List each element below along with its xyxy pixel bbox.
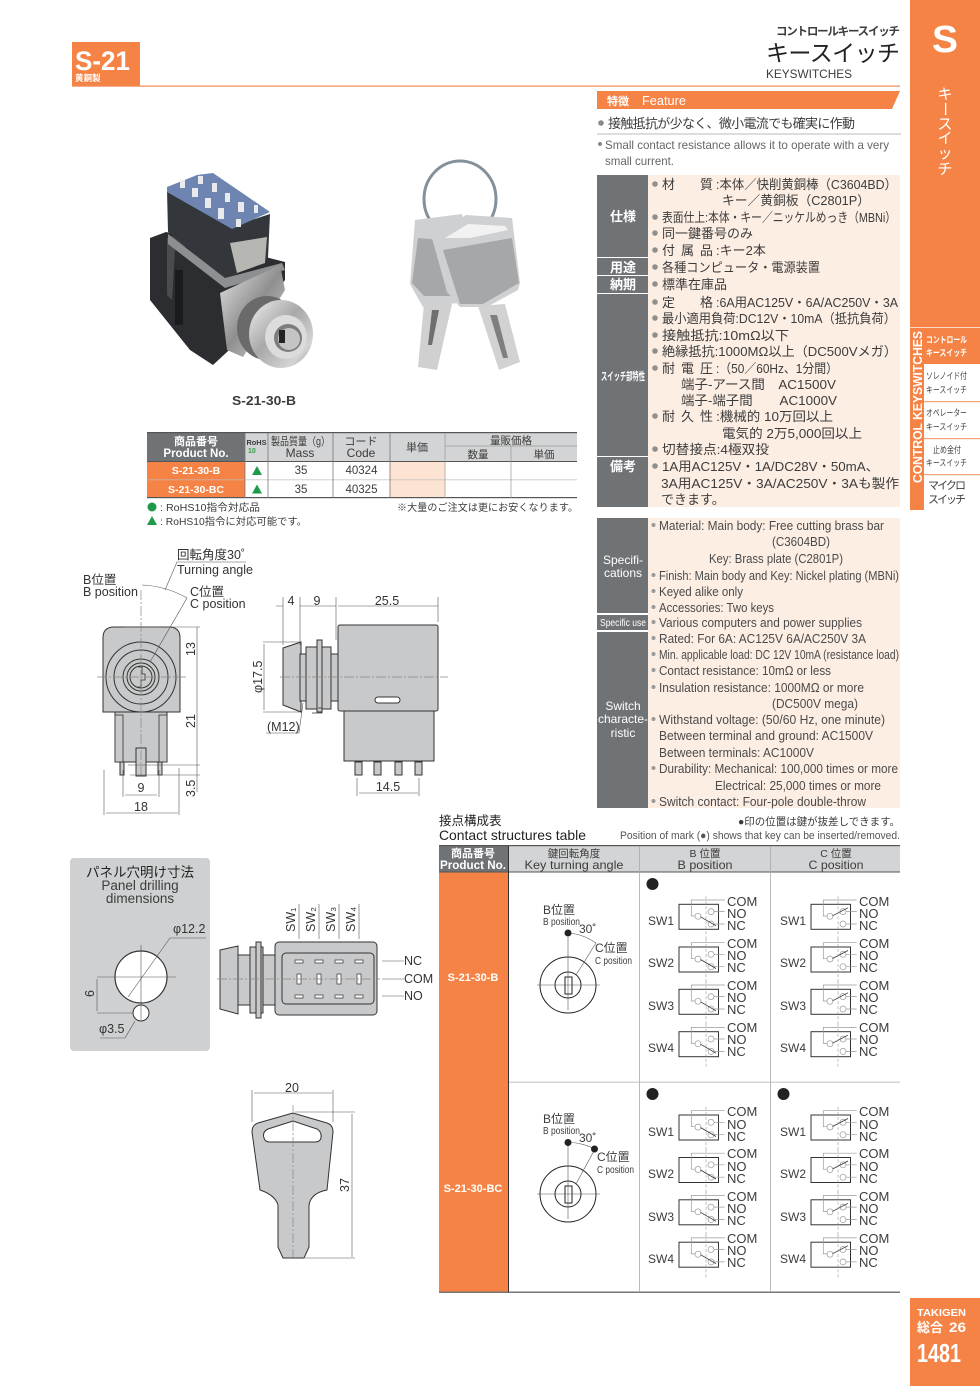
feature banner [597, 91, 900, 109]
product table: 数量 [468, 448, 489, 461]
contact diagrams: S-21-30-B, C position: NC [859, 960, 878, 975]
page number tab [910, 1298, 980, 1386]
specification panel Japanese: :（50／60Hz、1分間） [716, 361, 838, 376]
specification panel Japanese: 表面仕上:本体・キー／ニッケルめっき（MBNi） [662, 210, 896, 225]
photo caption: S-21-30-B [232, 393, 296, 408]
contact diagrams: S-21-30-B, B position: NO [727, 990, 746, 1005]
product table: 商品番号 [174, 434, 218, 448]
contact diagrams: S-21-30-B, C position: COM [859, 936, 889, 951]
side tab: キースイッチ [926, 385, 967, 395]
side tab: イ [937, 130, 953, 147]
contact diagrams: S-21-30-B, C position: NO [859, 948, 878, 963]
specification panel Japanese: 最小適用負荷:DC12V・10mA（抵抗負荷） [662, 311, 896, 326]
specification panel English: Switch contact: Four-pole double-throw [659, 795, 867, 809]
drawing: terminal view [217, 904, 433, 1018]
contact diagrams: S-21-30-BC, B position: COM [727, 1104, 757, 1119]
page title: KEYSWITCHES [766, 67, 852, 81]
drawing: terminal view: NO [404, 989, 423, 1003]
side tab: 止め金付 [933, 444, 961, 455]
product table: S-21-30-BC [168, 484, 224, 496]
contact diagrams: S-21-30-B, B position: SW3 [648, 999, 674, 1013]
specification panel English: Min. applicable load: DC 12V 10mA (resistance load) [659, 648, 899, 662]
product table: コード [344, 436, 378, 448]
drawing: side view: 4 [288, 594, 295, 608]
side tab: キースイッチ [926, 422, 967, 432]
drawing: side view: 25.5 [375, 594, 399, 608]
panel: drilling dimensions: パネル穴明け寸法 [86, 865, 194, 880]
contact diagrams: S-21-30-BC, B position: NC [727, 1129, 746, 1144]
drawing: front view: B position [83, 585, 138, 599]
drawing: front view: Turning angle [177, 563, 253, 577]
specification panel Japanese: 質 [700, 177, 713, 192]
specification panel Japanese: :本体／快削黄銅棒（C3604BD） [716, 177, 897, 192]
drawing: terminal view: SW₂ [304, 907, 318, 932]
contact diagrams: S-21-30-B, B position: SW4 [648, 1041, 674, 1055]
contact diagrams: S-21-30-B, B position: COM [727, 1020, 757, 1035]
side tab: キ [937, 86, 953, 103]
contact diagrams: S-21-30-BC, C position [778, 1088, 889, 1279]
product table: 製品質量（g） [271, 434, 330, 448]
contact diagrams: S-21-30-B, C position: NO [859, 1032, 878, 1047]
specification panel Japanese: 圧 [700, 361, 713, 376]
specification panel English: Withstand voltage: (50/60 Hz, one minute) [659, 713, 885, 727]
specification panel English: Electrical: 25,000 times or more [715, 779, 881, 793]
contact diagrams: S-21-30-B, C position: NC [859, 1002, 878, 1017]
drawing: terminal view: NC [404, 954, 422, 968]
series badge S-21 [72, 42, 140, 86]
contact diagrams: S-21-30-B, B position [646, 878, 757, 1069]
contact diagrams: S-21-30-B, C position: NC [859, 918, 878, 933]
drawing: front view [83, 547, 253, 815]
specification panel English: Rated: For 6A: AC125V 6A/AC250V 3A [659, 632, 867, 646]
key angle diagram: S-21-30-BC: C position [597, 1165, 634, 1176]
contact diagrams: S-21-30-B, C position: NO [859, 906, 878, 921]
drawing: side view: 14.5 [376, 780, 400, 794]
specification panel Japanese: 各種コンピュータ・電源装置 [662, 260, 820, 275]
contact diagrams: S-21-30-B, C position: SW3 [780, 999, 806, 1013]
contact diagrams: S-21-30-B, B position: SW2 [648, 956, 674, 970]
specification panel English: Insulation resistance: 1000MΩ or more [659, 681, 864, 695]
side tab: ッ [937, 145, 953, 162]
drawing: key [252, 1081, 355, 1258]
contact diagrams: S-21-30-BC, B position: SW4 [648, 1252, 674, 1266]
specification panel Japanese: 納期 [610, 277, 636, 292]
table footnotes: : RoHS10指令対応品 [160, 501, 260, 514]
panel: drilling dimensions: φ12.2 [173, 922, 205, 936]
drawing: front view: 9 [138, 781, 145, 795]
contact table: Product No. [440, 858, 506, 872]
contact table: Key turning angle [524, 858, 624, 872]
contact diagrams: S-21-30-B, B position: NO [727, 948, 746, 963]
specification panel English: Between terminals: AC1000V [659, 746, 815, 760]
contact diagrams: S-21-30-B, B position: NC [727, 918, 746, 933]
side tab: スイッチ [928, 493, 966, 506]
page title: キースイッチ [766, 40, 900, 66]
specification panel Japanese: 用途 [610, 260, 636, 275]
contact diagrams: S-21-30-BC, B position: NC [727, 1255, 746, 1270]
specification panel Japanese: :6A用AC125V・6A/AC250V・3A [716, 295, 898, 310]
specification panel English: ristic [611, 726, 635, 740]
contact diagrams: S-21-30-BC, C position: NC [859, 1171, 878, 1186]
contact diagrams: S-21-30-BC, B position: SW1 [648, 1125, 674, 1139]
key angle diagram: S-21-30-BC: 30˚ [579, 1131, 596, 1145]
side tab: ス [937, 116, 953, 133]
specification panel Japanese: :機械的 10万回以上 [716, 409, 833, 424]
specification panel Japanese [597, 175, 900, 507]
contact diagrams: S-21-30-B, C position: SW1 [780, 914, 806, 928]
specification panel Japanese: 品 [700, 243, 713, 258]
product table: 40325 [346, 484, 377, 496]
panel: drilling dimensions: dimensions [106, 891, 174, 906]
drawing: key: 37 [338, 1178, 352, 1192]
drawing: front view: 18 [134, 800, 148, 814]
specification panel English: (DC500V mega) [772, 697, 858, 711]
key angle diagram: S-21-30-BC: C位置 [597, 1150, 630, 1164]
contact diagrams: S-21-30-B, C position: SW2 [780, 956, 806, 970]
key angle diagram: S-21-30-B: 30˚ [579, 922, 596, 936]
specification panel Japanese: 耐 [662, 361, 675, 376]
specification panel Japanese: 定 [662, 295, 675, 310]
drawing: front view: C position [190, 597, 246, 611]
drawing: side view: (M12) [267, 720, 300, 734]
specification panel English: Keyed alike only [659, 585, 744, 599]
table footnotes: ※大量のご注文は更にお安くなります。 [397, 501, 578, 514]
contact diagrams: S-21-30-B, B position: NC [727, 1044, 746, 1059]
specification panel English: Between terminal and ground: AC1500V [659, 729, 874, 743]
specification panel Japanese: 電気的 2万5,000回以上 [722, 426, 862, 441]
page number tab: 26 [949, 1319, 966, 1335]
specification panel English: Switch [605, 699, 641, 713]
key angle diagram: S-21-30-B: B位置 [543, 903, 575, 917]
table footnotes [147, 501, 578, 528]
contact diagrams: S-21-30-B, B position: COM [727, 894, 757, 909]
contact diagrams: S-21-30-B, B position: SW1 [648, 914, 674, 928]
page number tab: 1481 [917, 1338, 961, 1368]
contact diagrams: S-21-30-BC, B position: NC [727, 1213, 746, 1228]
page number tab: 総合 [917, 1320, 943, 1335]
contact diagrams: S-21-30-B, C position [780, 894, 889, 1069]
contact diagrams: S-21-30-BC, B position: COM [727, 1231, 757, 1246]
specification panel Japanese: 接触抵抗:10mΩ以下 [662, 328, 789, 343]
product table: Mass [286, 446, 314, 460]
feature text: small current. [605, 154, 674, 168]
contact table: 商品番号 [451, 846, 495, 860]
contact diagrams: S-21-30-BC, C position: COM [859, 1146, 889, 1161]
contact diagrams: S-21-30-BC, C position: NO [859, 1243, 878, 1258]
contact diagrams: S-21-30-BC, C position: NO [859, 1117, 878, 1132]
contact diagrams: S-21-30-BC, C position: NC [859, 1129, 878, 1144]
drawing: side view: φ17.5 [251, 661, 265, 693]
specification panel Japanese: 電 [681, 361, 694, 376]
side tab: マイクロ [928, 479, 966, 492]
drawing: side view [251, 594, 448, 796]
side tab: オペレーター [926, 408, 967, 418]
product table: 35 [295, 465, 307, 477]
contact diagrams: S-21-30-B, B position: NO [727, 906, 746, 921]
product table [147, 432, 577, 498]
product table: S-21-30-B [172, 465, 221, 477]
contact diagrams: S-21-30-BC, C position: NC [859, 1255, 878, 1270]
contact diagrams: S-21-30-B, B position: NO [727, 1032, 746, 1047]
contact diagrams: S-21-30-BC, C position: SW3 [780, 1210, 806, 1224]
contact diagrams: S-21-30-B, C position: SW4 [780, 1041, 806, 1055]
side tab: CONTROL KEYSWITCHES [910, 331, 925, 483]
page title [766, 25, 900, 81]
contact table heading: 接点構成表 [439, 813, 502, 828]
contact diagrams: S-21-30-BC, B position [646, 1088, 757, 1279]
contact diagrams: S-21-30-B, C position: COM [859, 978, 889, 993]
specification panel English: Key: Brass plate (C2801P) [709, 552, 843, 566]
photo: key switch [150, 173, 313, 368]
side tab [910, 0, 980, 510]
contact diagrams: S-21-30-B, C position: COM [859, 1020, 889, 1035]
product table: Product No. [163, 448, 229, 460]
specification panel Japanese: 材 [662, 177, 675, 192]
specification panel Japanese: できます。 [661, 492, 725, 507]
contact table heading: ●印の位置は鍵が抜差しできます。 [738, 815, 900, 828]
contact diagrams: S-21-30-BC, B position: NO [727, 1117, 746, 1132]
specification panel Japanese: 付 [662, 243, 675, 258]
specification panel Japanese: 1A用AC125V・1A/DC28V・50mA、 [662, 459, 879, 474]
product table: 単価 [534, 448, 554, 461]
drawing: terminal view: COM [404, 972, 433, 986]
specification panel Japanese: 3A用AC125V・3A/AC250V・3Aも製作 [661, 476, 899, 491]
drawing: front view: 3.5 [184, 780, 198, 797]
panel: drilling dimensions: 9 [82, 990, 96, 997]
panel: drilling dimensions: φ3.5 [99, 1022, 125, 1036]
contact diagrams: S-21-30-BC, B position: SW3 [648, 1210, 674, 1224]
table footnotes: : RoHS10指令に対応可能です。 [160, 515, 307, 528]
contact table [439, 845, 900, 1293]
specification panel English: Various computers and power supplies [659, 616, 862, 630]
specification panel Japanese: 耐 [662, 409, 675, 424]
specification panel Japanese: 絶縁抵抗:1000MΩ以上（DC500Vメガ） [662, 344, 897, 359]
contact diagrams: S-21-30-BC, C position: NO [859, 1159, 878, 1174]
contact diagrams: S-21-30-BC, C position: COM [859, 1231, 889, 1246]
side tab: S [932, 19, 958, 61]
specification panel Japanese: 切替接点:4極双投 [662, 442, 769, 457]
contact table heading: Position of mark (●) shows that key can be inserted/removed. [620, 830, 900, 842]
specification panel English: Finish: Main body and Key: Nickel plating (MBNi) [659, 569, 899, 583]
drawing: terminal view: SW₄ [344, 907, 358, 932]
panel: drilling dimensions [70, 858, 210, 1051]
contact diagrams: S-21-30-BC, C position: SW2 [780, 1167, 806, 1181]
product table: 単価 [406, 440, 428, 454]
product table: 35 [295, 484, 307, 496]
specification panel Japanese: 同一鍵番号のみ [662, 226, 753, 241]
contact diagrams: S-21-30-BC, B position: COM [727, 1146, 757, 1161]
panel: drilling dimensions: Panel drilling [101, 878, 179, 893]
contact table: B 位置 [690, 847, 721, 860]
specification panel English: characte- [598, 712, 648, 726]
drawing: front view: 13 [184, 642, 198, 656]
product table: 10 [248, 448, 256, 455]
contact table: S-21-30-B [448, 972, 498, 984]
contact table heading: Contact structures table [439, 827, 586, 843]
contact diagrams: S-21-30-B, C position: COM [859, 894, 889, 909]
contact diagrams: S-21-30-B, B position: COM [727, 978, 757, 993]
series badge S-21: 黄銅製 [75, 73, 101, 83]
contact diagrams: S-21-30-BC, C position: NO [859, 1201, 878, 1216]
contact diagrams: S-21-30-BC, B position: COM [727, 1189, 757, 1204]
side tab: ー [936, 101, 953, 117]
specification panel Japanese: 性 [700, 409, 713, 424]
product table: Code [347, 446, 376, 460]
drawing: front view: C位置 [190, 585, 224, 599]
contact table: B position [678, 858, 732, 872]
contact diagrams: S-21-30-BC, C position: COM [859, 1104, 889, 1119]
key angle diagram: S-21-30-BC: B位置 [543, 1112, 575, 1126]
specification panel Japanese: 端子-端子間 AC1000V [681, 393, 837, 408]
specification panel English: Specific use [600, 618, 646, 629]
contact diagrams: S-21-30-BC, B position: NC [727, 1171, 746, 1186]
specification panel Japanese: 備考 [610, 459, 636, 474]
contact table: C 位置 [820, 847, 852, 860]
specification panel Japanese: 属 [681, 243, 694, 258]
drawing: key: 20 [285, 1081, 299, 1095]
specification panel English: Durability: Mechanical: 100,000 times or more [659, 762, 898, 776]
specification panel Japanese: :キー2本 [716, 243, 766, 258]
specification panel English [597, 518, 900, 809]
contact diagrams: S-21-30-B, B position: NC [727, 1002, 746, 1017]
drawing: terminal view: SW₃ [324, 907, 338, 932]
series badge S-21: S-21 [75, 46, 130, 76]
feature text: Small contact resistance allows it to operate with a very [605, 138, 889, 152]
key angle diagram: S-21-30-BC: B position [543, 1126, 580, 1137]
key angle diagram: S-21-30-B [537, 903, 632, 1013]
contact diagrams: S-21-30-BC, B position: NO [727, 1243, 746, 1258]
specification panel English: cations [604, 566, 642, 580]
contact table: S-21-30-BC [444, 1183, 502, 1195]
specification panel English: Contact resistance: 10mΩ or less [659, 664, 831, 678]
side tab: ソレノイド付 [926, 371, 967, 381]
specification panel English: (C3604BD) [772, 535, 830, 549]
specification panel Japanese: 端子-アース間 AC1500V [681, 377, 836, 392]
side tab: キースイッチ [926, 458, 967, 468]
specification panel English: Material: Main body: Free cutting brass bar [659, 519, 884, 533]
feature text [597, 116, 901, 168]
product table: RoHS [246, 438, 266, 447]
contact diagrams: S-21-30-BC, C position: SW4 [780, 1252, 806, 1266]
contact table: C position [808, 858, 864, 872]
contact diagrams: S-21-30-BC, C position: SW1 [780, 1125, 806, 1139]
contact diagrams: S-21-30-BC, B position: NO [727, 1201, 746, 1216]
specification panel English: Specifi- [603, 553, 643, 567]
side tab: チ [937, 161, 953, 178]
specification panel Japanese: 仕様 [610, 209, 636, 224]
contact diagrams: S-21-30-B, C position: NO [859, 990, 878, 1005]
drawing: terminal view: SW₁ [284, 908, 298, 932]
key angle diagram: S-21-30-BC [537, 1112, 634, 1222]
contact diagrams: S-21-30-BC, C position: NC [859, 1213, 878, 1228]
drawing: front view: B位置 [83, 573, 116, 587]
feature banner: 特徴 [607, 94, 629, 108]
specification panel English: Accessories: Two keys [659, 601, 774, 615]
contact diagrams: S-21-30-B, C position: NC [859, 1044, 878, 1059]
specification panel Japanese: スイッチ部特性 [601, 369, 645, 383]
contact diagrams: S-21-30-B, B position: COM [727, 936, 757, 951]
contact diagrams: S-21-30-BC, B position: NO [727, 1159, 746, 1174]
contact table: 鍵回転角度 [548, 847, 601, 860]
contact table heading [439, 813, 900, 843]
specification panel Japanese: 標準在庫品 [662, 277, 727, 292]
contact diagrams: S-21-30-B, B position: NC [727, 960, 746, 975]
feature text: 接触抵抗が少なく、微小電流でも確実に作動 [608, 116, 855, 131]
contact diagrams: S-21-30-BC, B position: SW2 [648, 1167, 674, 1181]
page title: コントロールキースイッチ [776, 25, 900, 38]
side tab: キースイッチ [926, 348, 967, 358]
specification panel Japanese: キー／黄銅板（C2801P） [722, 193, 870, 208]
product table: 量販価格 [490, 434, 532, 447]
specification panel Japanese: 久 [681, 409, 694, 424]
product table: 40324 [346, 465, 378, 477]
key angle diagram: S-21-30-B: C位置 [595, 941, 628, 955]
key angle diagram: S-21-30-B: B position [543, 917, 580, 928]
photo: two keys with ring [410, 161, 520, 370]
feature banner: Feature [642, 94, 686, 108]
specification panel Japanese: 格 [700, 295, 713, 310]
side tab: コントロール [926, 335, 967, 345]
drawing: side view: 9 [314, 594, 321, 608]
contact diagrams: S-21-30-BC, C position: COM [859, 1189, 889, 1204]
key angle diagram: S-21-30-B: C position [595, 956, 632, 967]
drawing: front view: 21 [184, 714, 198, 728]
drawing: front view: 回転角度30˚ [177, 547, 245, 562]
page number tab: TAKIGEN [917, 1307, 966, 1319]
